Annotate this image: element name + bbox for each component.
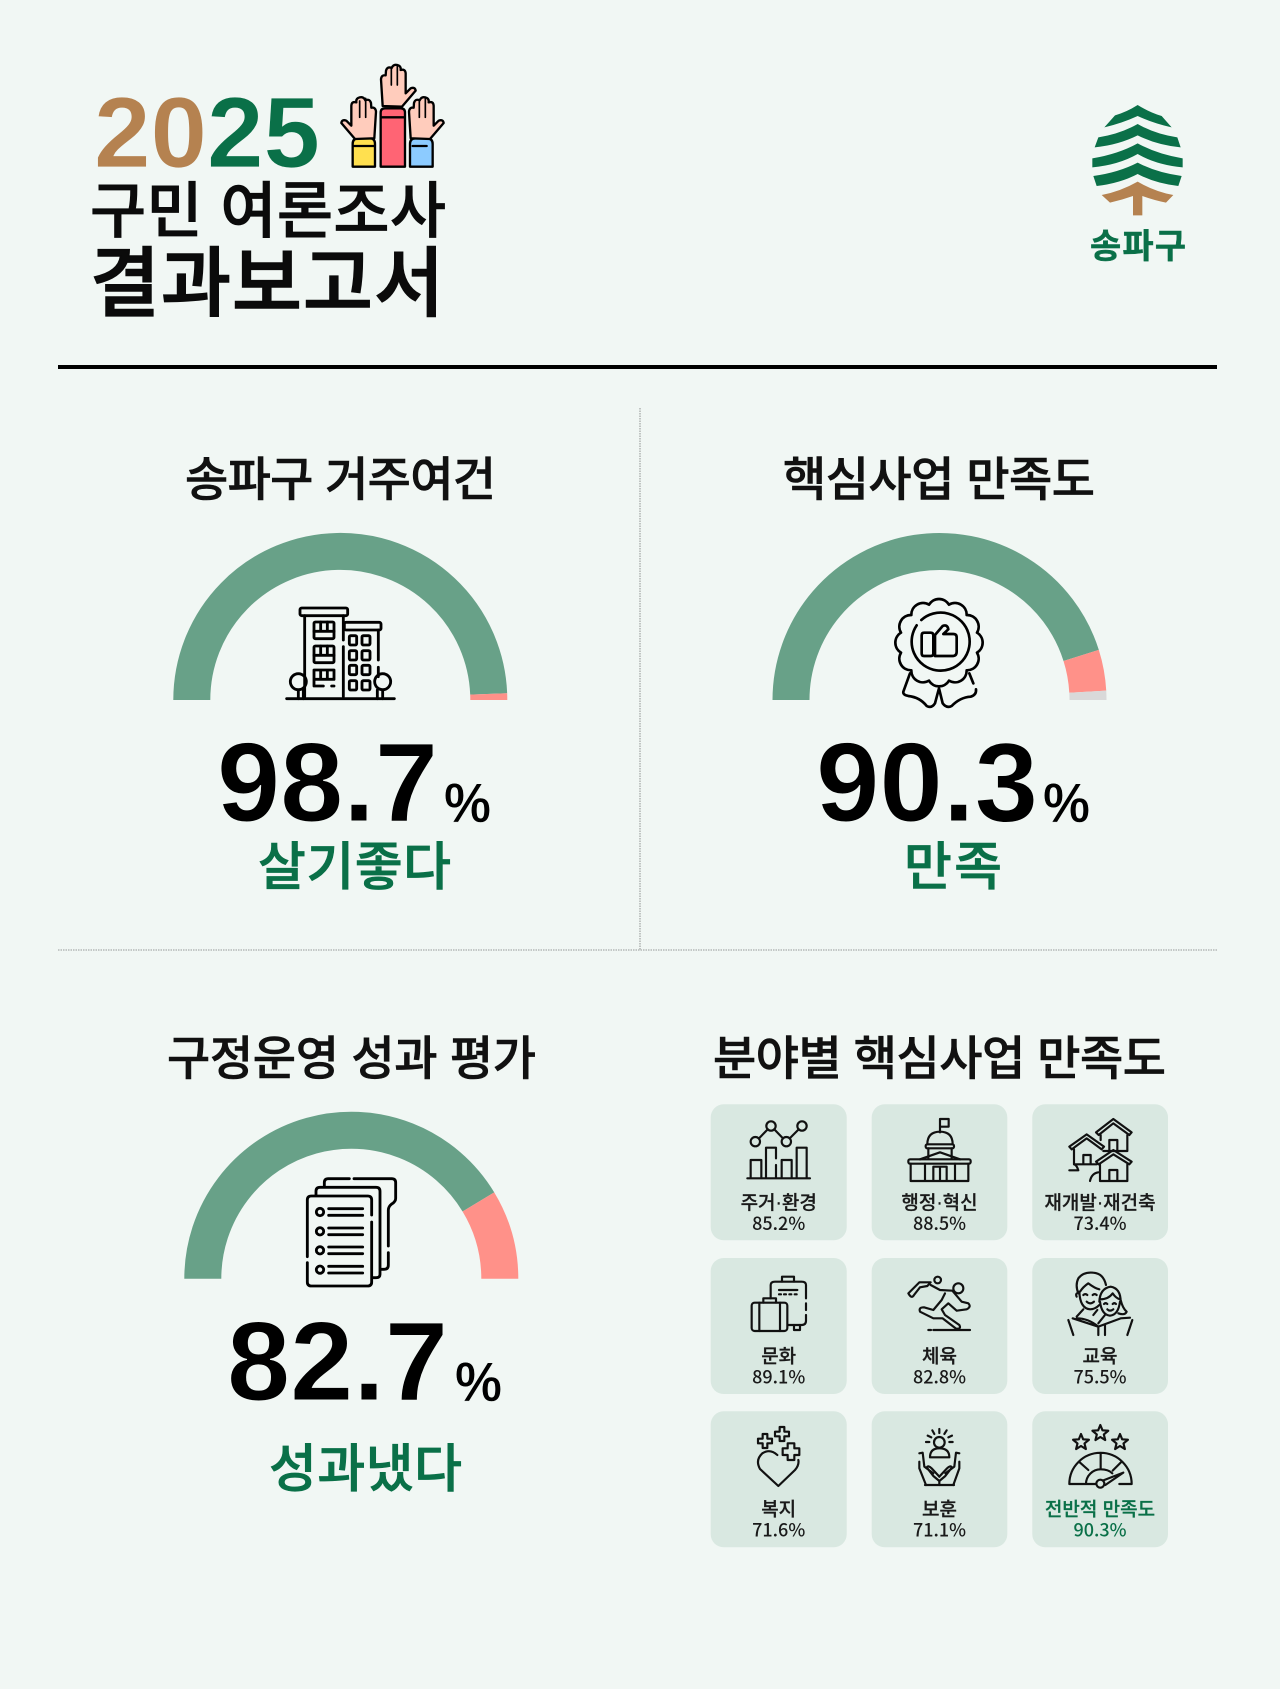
card: welfare — [711, 1411, 847, 1547]
gauge 98.7 — [192, 551, 489, 700]
title year 2025: 2025 — [94, 77, 320, 189]
value: 82.8% — [913, 1364, 966, 1390]
card: sports — [872, 1258, 1007, 1394]
icon: stars and gauge — [1069, 1425, 1132, 1488]
icon: award ribbon thumbs up — [895, 599, 983, 707]
value: 73.4% — [1073, 1210, 1127, 1236]
heading: 핵심사업 만족도 — [783, 453, 1095, 506]
label: 교육 — [1083, 1346, 1117, 1368]
gauge 82.7 — [203, 1130, 500, 1279]
divider — [58, 365, 1217, 369]
percent sign: % — [455, 1350, 502, 1413]
card: redevelopment — [1032, 1104, 1168, 1240]
value: 71.6% — [752, 1516, 805, 1542]
icon: runner — [908, 1277, 970, 1330]
icon: houses — [1069, 1119, 1132, 1181]
value: 71.1% — [913, 1516, 966, 1542]
heading: 송파구 거주여건 — [185, 453, 496, 506]
label: 문화 — [761, 1346, 796, 1368]
title block — [90, 65, 446, 327]
icon: documents — [307, 1179, 396, 1286]
panel: administration performance — [167, 1032, 536, 1499]
percent sign: % — [1043, 771, 1090, 834]
panel: core project satisfaction — [783, 453, 1095, 897]
gauge 90.3 — [791, 551, 1088, 700]
icon: luggage — [752, 1277, 806, 1331]
label: 행정·혁신 — [901, 1192, 978, 1214]
value: 75.5% — [1073, 1364, 1127, 1390]
title line 2: 결과보고서 — [90, 242, 444, 327]
icon: family reading — [1068, 1273, 1132, 1335]
value: 98.7 — [217, 720, 438, 845]
caption: 만족 — [904, 839, 1002, 897]
title line 1: 구민 여론조사 — [90, 177, 446, 245]
value: 82.7 — [227, 1299, 448, 1424]
icon: raised hands — [341, 65, 444, 167]
card: overall satisfaction — [1032, 1411, 1168, 1547]
label: 주거·환경 — [741, 1192, 817, 1214]
card: education — [1032, 1258, 1168, 1394]
tree mark — [1092, 105, 1183, 215]
card: housing environment — [711, 1104, 847, 1240]
icon: heart with crosses — [758, 1427, 799, 1486]
label: 전반적 만족도 — [1045, 1498, 1155, 1520]
icon: chart — [747, 1121, 810, 1178]
heading: 구정운영 성과 평가 — [167, 1032, 536, 1085]
card: veterans — [872, 1411, 1007, 1547]
icon: buildings — [287, 608, 394, 699]
label: 체육 — [922, 1346, 957, 1368]
caption: 살기좋다 — [258, 839, 451, 897]
label: 보훈 — [922, 1498, 957, 1520]
card: culture — [711, 1258, 847, 1394]
icon: capitol — [908, 1119, 971, 1181]
percent sign: % — [444, 771, 491, 834]
value: 89.1% — [752, 1364, 805, 1390]
label: 복지 — [761, 1498, 796, 1520]
panel: residential conditions — [185, 453, 496, 897]
caption: 성과냈다 — [269, 1441, 462, 1499]
logo: Songpa-gu tree — [1090, 105, 1186, 266]
card: administration innovation — [872, 1104, 1007, 1240]
value: 90.3% — [1073, 1516, 1127, 1542]
value: 85.2% — [752, 1210, 805, 1236]
heading: satisfaction by field: 분야별 핵심사업 만족도 — [713, 1032, 1166, 1085]
value: 88.5% — [913, 1210, 966, 1236]
label: 재개발·재건축 — [1044, 1192, 1156, 1214]
logo wordmark: 송파구 — [1090, 228, 1186, 266]
icon: person in hands — [919, 1429, 959, 1485]
value: 90.3 — [816, 720, 1038, 845]
